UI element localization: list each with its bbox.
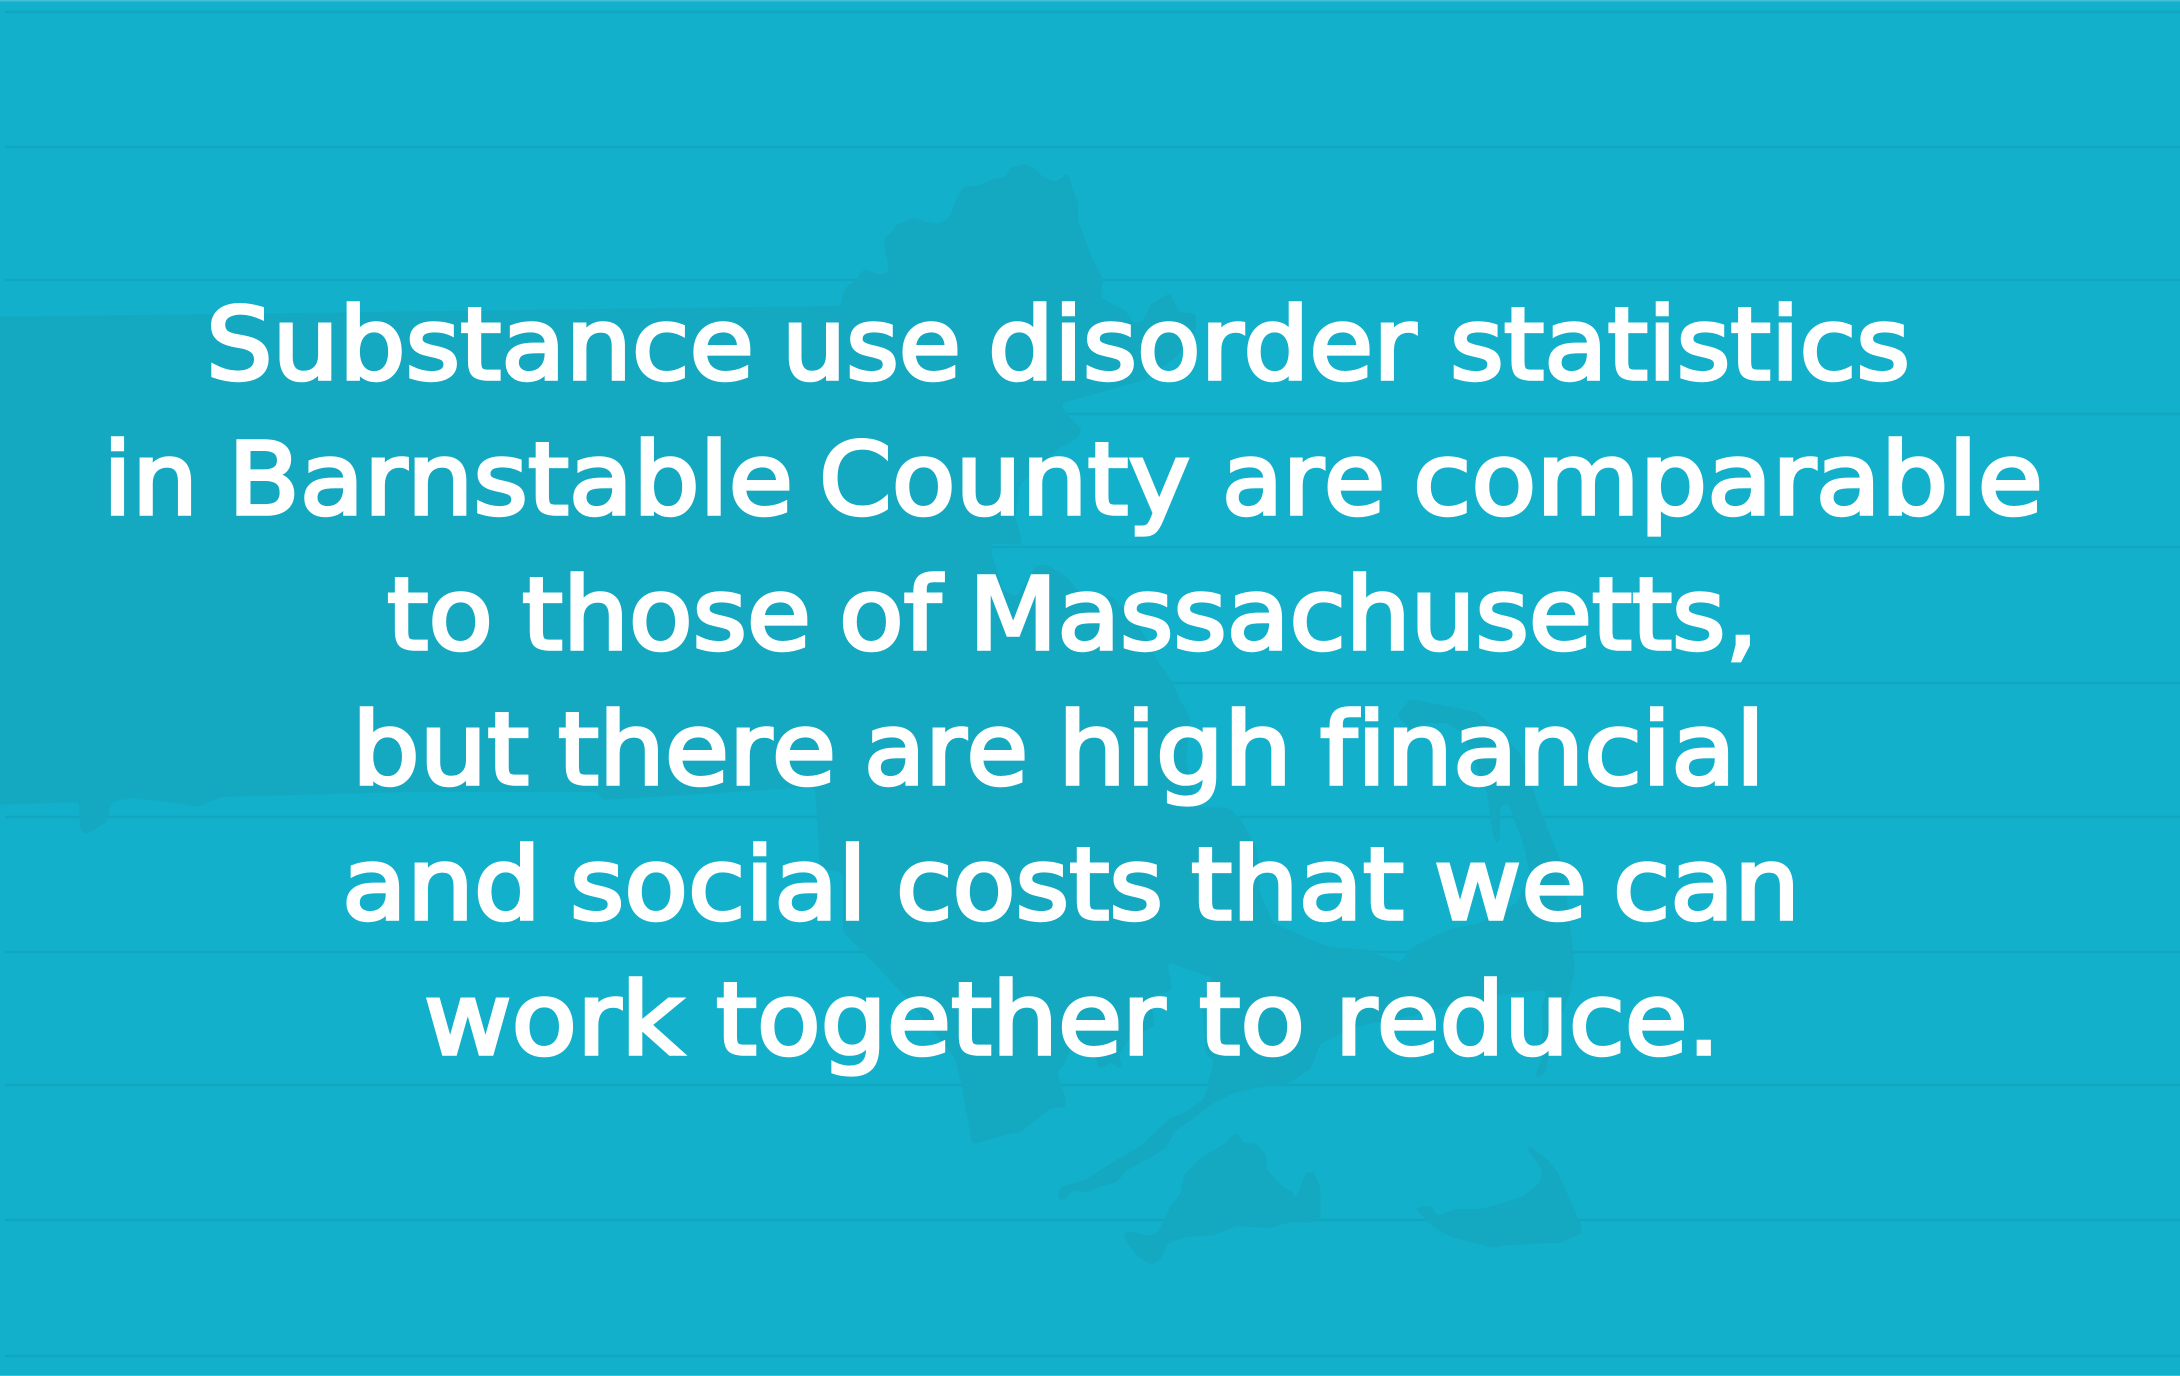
line 2: comparable xyxy=(1413,421,2043,538)
line 2: Barnstable xyxy=(228,421,793,538)
line 5: costs xyxy=(896,826,1163,943)
line 3 xyxy=(387,556,1758,673)
line 6 xyxy=(424,961,1720,1078)
background map: Massachusetts silhouette xyxy=(0,164,1582,1265)
line 6: work xyxy=(424,961,683,1078)
Nantucket xyxy=(1414,1144,1582,1248)
line 1: Substance xyxy=(206,286,754,403)
line 2 xyxy=(103,421,2043,538)
line 5: we xyxy=(1434,826,1587,943)
line 3: to xyxy=(387,556,493,673)
line 1 xyxy=(206,286,1910,403)
line 1: disorder xyxy=(988,286,1417,403)
line 4: high xyxy=(1058,691,1292,808)
line 2: County xyxy=(819,421,1190,538)
line 1: statistics xyxy=(1450,286,1910,403)
line 4: financial xyxy=(1320,691,1765,808)
Martha's Vineyard xyxy=(1123,1131,1321,1265)
line 5: social xyxy=(570,826,867,943)
line 4 xyxy=(352,691,1765,808)
line 4: but xyxy=(352,691,529,808)
line 6: to xyxy=(1199,961,1305,1078)
line 6: reduce. xyxy=(1335,961,1720,1078)
line 4: there xyxy=(558,691,836,808)
line 5: that xyxy=(1191,826,1404,943)
line 5: can xyxy=(1613,826,1800,943)
line 2: are xyxy=(1222,421,1385,538)
line 1: use xyxy=(782,286,961,403)
line 6: together xyxy=(716,961,1166,1078)
line 3: those xyxy=(522,556,811,673)
line 3: of xyxy=(839,556,944,673)
line 5 xyxy=(342,826,1800,943)
line 4: are xyxy=(864,691,1028,808)
mainland and Cape Cod xyxy=(0,164,1575,1200)
line 5: and xyxy=(342,826,541,943)
line 2: in xyxy=(103,421,198,538)
headline statement xyxy=(103,286,2043,1078)
line 3: Massachusetts, xyxy=(969,556,1758,673)
